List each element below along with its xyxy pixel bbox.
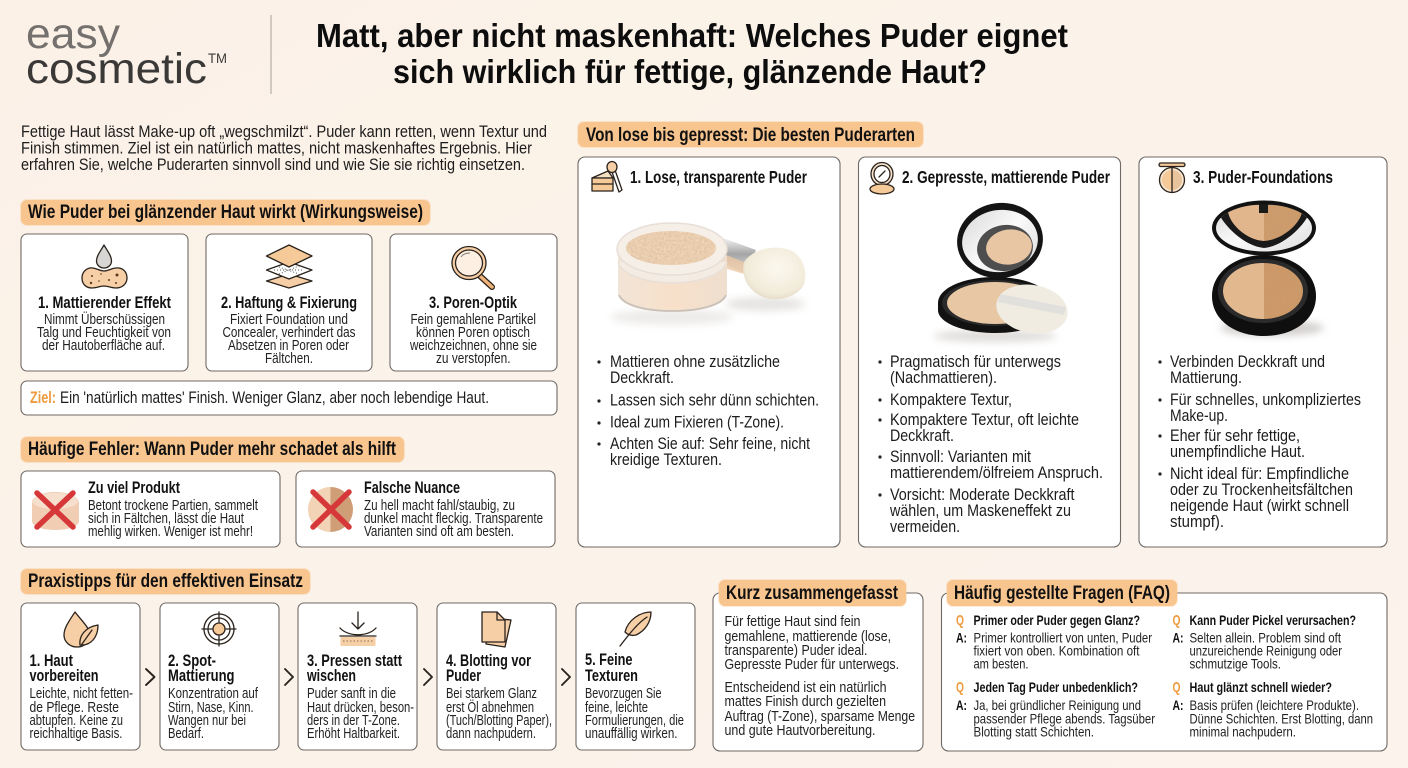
icon: blotting papers xyxy=(482,612,511,647)
text block: Puder sanft in die xyxy=(307,686,396,702)
FAQ item 1 xyxy=(956,612,1152,672)
text block: der Hautoberfläche auf. xyxy=(42,338,165,354)
text block: sich in Fältchen, lässt die Haut xyxy=(88,511,244,527)
text block: dann nachpudern. xyxy=(446,726,536,742)
FAQ item 2 xyxy=(956,679,1155,740)
bullet list xyxy=(597,352,819,469)
icon: layers xyxy=(266,245,312,288)
heading: Puderarten: Von lose bis gepresst: Die besten Puderarten xyxy=(586,124,915,146)
heading: 2. Haftung & Fixierung xyxy=(221,293,357,312)
logo: cosmetic xyxy=(26,45,207,93)
text block: Fein gemahlene Partikel xyxy=(410,312,536,328)
bullet list: (Nachmattieren). xyxy=(890,368,997,387)
text block: Für fettige Haut sind fein xyxy=(724,614,860,630)
heading xyxy=(719,580,906,606)
panel: Puder-Foundations xyxy=(1139,157,1387,547)
text block: Absetzen in Poren oder xyxy=(228,338,349,354)
icon: target xyxy=(202,612,236,646)
text block xyxy=(409,312,537,367)
heading: wischen xyxy=(306,666,356,685)
heading: vorbereiten xyxy=(30,666,98,685)
text block xyxy=(446,686,552,742)
FAQ item 2: Jeden Tag Puder unbedenklich? xyxy=(974,680,1138,695)
text block: können Poren optisch xyxy=(416,325,530,341)
heading: Wirkungsweise: Wie Puder bei glänzender Haut wirkt (Wirkungsweise) xyxy=(28,201,423,223)
text block: feine, leichte xyxy=(585,700,648,716)
text block: mattes Finish durch gezielten xyxy=(724,694,886,710)
text block xyxy=(30,686,133,742)
bullet list: unempfindliche Haut. xyxy=(1170,442,1305,461)
text block: Formulierungen, die xyxy=(585,713,684,729)
panel: Tipp 3 xyxy=(298,603,417,750)
icon: magnifier xyxy=(452,246,492,287)
image: powder foundation compact xyxy=(1212,200,1324,336)
text block: Fixiert Foundation und xyxy=(230,312,348,328)
FAQ item 4: Haut glänzt schnell wieder? xyxy=(1190,680,1332,695)
text block: Gepresste Puder für unterwegs. xyxy=(724,657,899,673)
text block xyxy=(222,312,356,367)
bullet list xyxy=(1158,352,1361,531)
text block: Leichte, nicht fetten- xyxy=(30,686,133,702)
image: pressed powder compact with puff xyxy=(933,197,1072,342)
FAQ item 4: Q xyxy=(1172,679,1181,696)
FAQ item 4: Basis prüfen (leichtere Produkte). xyxy=(1190,697,1359,713)
panel: Tipp 2 xyxy=(160,603,279,750)
heading xyxy=(446,651,531,685)
text block: weichzeichnen, ohne sie xyxy=(409,338,537,354)
bullet list: Sinnvoll: Varianten mit xyxy=(890,447,1031,466)
callout: Ziel: Ein 'natürlich mattes' Finish. Weniger Glanz, aber noch lebendige Haut. xyxy=(60,388,489,407)
heading: Falsche Nuance xyxy=(364,478,460,497)
text block: Bedarf. xyxy=(168,726,204,742)
icon: feather xyxy=(620,612,651,646)
bullet list: oder zu Trockenheitsfältchen xyxy=(1170,480,1353,499)
heading xyxy=(585,650,638,685)
bullet list: Vorsicht: Moderate Deckkraft xyxy=(890,485,1075,504)
text block: Entscheidend ist ein natürlich xyxy=(724,680,886,696)
text block: Konzentration auf xyxy=(168,686,259,702)
bullet list xyxy=(878,352,1103,536)
logo: TM xyxy=(208,50,227,66)
text block: de Pflege. Reste xyxy=(30,700,119,716)
text block: Varianten sind oft am besten. xyxy=(364,524,514,540)
heading: Häufig gestellte Fragen (FAQ) xyxy=(954,582,1170,604)
panel: Zu viel Produkt xyxy=(21,471,280,547)
text block: Bevorzugen Sie xyxy=(585,686,662,702)
FAQ item 2: Q xyxy=(956,679,964,696)
heading: Mattierung xyxy=(168,666,234,685)
FAQ item 4: minimal nachpudern. xyxy=(1190,724,1296,740)
heading: 3. Poren-Optik xyxy=(429,293,517,312)
FAQ item 1: am besten. xyxy=(974,656,1028,672)
bullet list: Eher für sehr fettige, xyxy=(1170,426,1300,445)
FAQ item 2: Blotting statt Schichten. xyxy=(974,724,1094,740)
icon: jar crossed out xyxy=(32,492,79,530)
text block: unauffällig wirken. xyxy=(585,726,678,742)
bullet list: Deckkraft. xyxy=(610,368,674,387)
heading xyxy=(168,651,234,685)
text block xyxy=(88,498,258,540)
bullet list: Kompaktere Textur, oft leichte xyxy=(890,410,1079,429)
panel: Falsche Nuance xyxy=(296,471,555,547)
text block: Concealer, verhindert das xyxy=(222,325,356,341)
icon: loose powder and brush xyxy=(592,162,622,192)
icon: press xyxy=(340,612,376,646)
icon: split compact xyxy=(1159,163,1185,192)
text block: Betont trockene Partien, sammelt xyxy=(88,498,258,514)
text block: erst Öl abnehmen xyxy=(446,698,534,716)
bullet list: Mattieren ohne zusätzliche xyxy=(610,352,780,371)
bullet list: mattierendem/ölfreiem Anspruch. xyxy=(890,463,1103,482)
FAQ item 3: Selten allein. Problem sind oft xyxy=(1190,630,1341,646)
bullet list: Achten Sie auf: Sehr feine, nicht xyxy=(610,434,810,453)
bullet list: wählen, um Maskeneffekt zu xyxy=(889,501,1071,520)
FAQ item 2: passender Pflege abends. Tagsüber xyxy=(974,710,1155,726)
FAQ item 3: Kann Puder Pickel verursachen? xyxy=(1190,613,1356,628)
heading xyxy=(947,580,1177,606)
text block: Bei starkem Glanz xyxy=(446,686,537,702)
text block: und gute Hautvorbereitung. xyxy=(724,723,876,739)
text block: dunkel macht fleckig. Transparente xyxy=(364,511,543,527)
text block: Wangen nur bei xyxy=(168,713,246,729)
text block: Talg und Feuchtigkeit von xyxy=(37,325,171,341)
text block xyxy=(307,686,414,742)
text block: transparente) Puder ideal. xyxy=(724,643,868,659)
text block xyxy=(168,686,259,742)
text block: mehlig wirken. Weniger ist mehr! xyxy=(88,524,253,540)
text block: Fältchen. xyxy=(265,351,313,367)
icon: shade disc crossed out xyxy=(308,487,353,532)
text block: abtupfen. Keine zu xyxy=(30,713,123,729)
text block: reichhaltige Basis. xyxy=(30,726,122,742)
image: loose powder jar with brush xyxy=(610,223,805,325)
text block: Stirn, Nase, Kinn. xyxy=(168,700,254,716)
bullet list: Lassen sich sehr dünn schichten. xyxy=(610,390,819,410)
heading: 3. Puder-Foundations xyxy=(1193,167,1333,187)
heading: 1. Lose, transparente Puder xyxy=(630,167,807,187)
arrow xyxy=(562,669,570,685)
heading: 4. Blotting vor xyxy=(446,651,531,670)
bullet list: Mattierung. xyxy=(1170,368,1242,387)
icon: compact xyxy=(870,162,894,194)
FAQ item 4 xyxy=(1172,679,1373,740)
intro text: Finish stimmen. Ziel ist ein natürlich mattes, nicht maskenhaftes Ergebnis. Hier xyxy=(21,138,532,158)
text block xyxy=(37,310,171,354)
panel: Haftung und Fixierung xyxy=(206,234,372,371)
text block xyxy=(364,498,543,540)
bullet list: Für schnelles, unkompliziertes xyxy=(1170,390,1361,409)
title xyxy=(316,17,1068,90)
bullet list: neigende Haut (wirkt schnell xyxy=(1170,496,1349,515)
logo xyxy=(26,10,227,93)
text block: gemahlene, mattierende (lose, xyxy=(724,629,891,645)
heading: Puder xyxy=(446,666,481,685)
text block: Zu hell macht fahl/staubig, zu xyxy=(364,498,515,514)
bullet list: vermeiden. xyxy=(890,517,960,536)
FAQ item 3: unzureichende Reinigung oder xyxy=(1190,642,1342,658)
intro text: erfahren Sie, welche Puderarten sinnvoll sind und wie Sie sie richtig einsetzen. xyxy=(21,155,525,174)
FAQ item 1: fixiert von oben. Kombination oft xyxy=(974,642,1140,658)
text block: Auftrag (T-Zone), sparsame Menge xyxy=(724,709,915,725)
heading: 3. Pressen statt xyxy=(307,651,402,670)
panel: Kurz zusammengefasst xyxy=(713,580,923,751)
FAQ item 1: Primer kontrolliert von unten, Puder xyxy=(974,630,1152,646)
heading xyxy=(306,651,402,685)
logo: easy xyxy=(26,10,121,58)
text block: (Tuch/Blotting Paper), xyxy=(446,713,552,729)
bullet list: Nicht ideal für: Empfindliche xyxy=(1170,464,1349,483)
panel: gepresste Puder xyxy=(858,157,1120,547)
heading: Zu viel Produkt xyxy=(88,478,180,497)
icon: sponge and drop xyxy=(82,245,127,288)
panel: Poren-Optik xyxy=(390,234,557,371)
bullet list: Kompaktere Textur, xyxy=(890,390,1012,409)
bullet list: Pragmatisch für unterwegs xyxy=(890,352,1061,371)
text block xyxy=(724,614,915,739)
heading: Texturen xyxy=(585,666,638,685)
FAQ item 4: A: xyxy=(1172,698,1184,713)
bullet list: Make-up. xyxy=(1170,406,1228,425)
panel: Tipp 5 xyxy=(576,603,695,750)
FAQ item 2: A: xyxy=(956,698,967,713)
intro text xyxy=(21,122,547,174)
FAQ item 1: Primer oder Puder gegen Glanz? xyxy=(974,613,1140,628)
intro text: Fettige Haut lässt Make-up oft „wegschmilzt“. Puder kann retten, wenn Textur und xyxy=(21,122,547,141)
title: sich wirklich für fettige, glänzende Haut? xyxy=(393,53,987,90)
heading: 1. Mattierender Effekt xyxy=(38,293,171,312)
heading: 2. Spot- xyxy=(168,651,216,670)
panel: lose Puder xyxy=(578,157,840,547)
text block: Haut drücken, beson- xyxy=(307,700,414,716)
heading: Praxistipps: Praxistipps für den effektiven Einsatz xyxy=(28,570,303,592)
panel: Tipp 1 xyxy=(21,603,140,750)
icon: drop and leaf xyxy=(64,612,98,647)
bullet list: Ideal zum Fixieren (T-Zone). xyxy=(610,412,784,432)
arrow xyxy=(146,669,154,685)
heading: 1. Haut xyxy=(30,651,73,670)
FAQ item 3: A: xyxy=(1172,630,1184,646)
FAQ item 3 xyxy=(1172,612,1356,672)
FAQ item 3: schmutzige Tools. xyxy=(1190,656,1281,672)
FAQ item 2: Ja, bei gründlicher Reinigung und xyxy=(974,697,1141,713)
FAQ item 1: Q xyxy=(956,612,964,629)
heading: Häufige Fehler: Häufige Fehler: Wann Puder mehr schadet als hilft xyxy=(28,438,396,460)
heading: 2. Gepresste, mattierende Puder xyxy=(902,167,1110,187)
panel: FAQ xyxy=(942,580,1387,751)
text block xyxy=(585,686,684,742)
arrow xyxy=(285,669,293,685)
text block: ders in der T-Zone. xyxy=(307,713,400,729)
FAQ item 3: Q xyxy=(1172,612,1181,629)
heading: Kurz zusammengefasst xyxy=(726,582,898,604)
FAQ item 1: A: xyxy=(956,630,967,646)
title: Matt, aber nicht maskenhaft: Welches Puder eignet xyxy=(316,17,1068,54)
callout: Ziel: Ziel: xyxy=(30,388,56,407)
panel: Tipp 4 xyxy=(437,603,556,750)
bullet list: stumpf). xyxy=(1170,512,1224,531)
bullet list: kreidige Texturen. xyxy=(610,450,722,469)
heading xyxy=(30,651,98,685)
text block: zu verstopfen. xyxy=(436,351,510,367)
text block: Nimmt Überschüssigen xyxy=(44,310,165,328)
text block: Erhöht Haltbarkeit. xyxy=(307,726,400,742)
arrow xyxy=(424,669,432,685)
panel: mattierender Effekt xyxy=(21,234,188,371)
heading: 5. Feine xyxy=(585,650,632,669)
bullet list: Verbinden Deckkraft und xyxy=(1170,352,1325,371)
callout: Ziel xyxy=(21,381,557,415)
bullet list: Deckkraft. xyxy=(890,426,954,445)
